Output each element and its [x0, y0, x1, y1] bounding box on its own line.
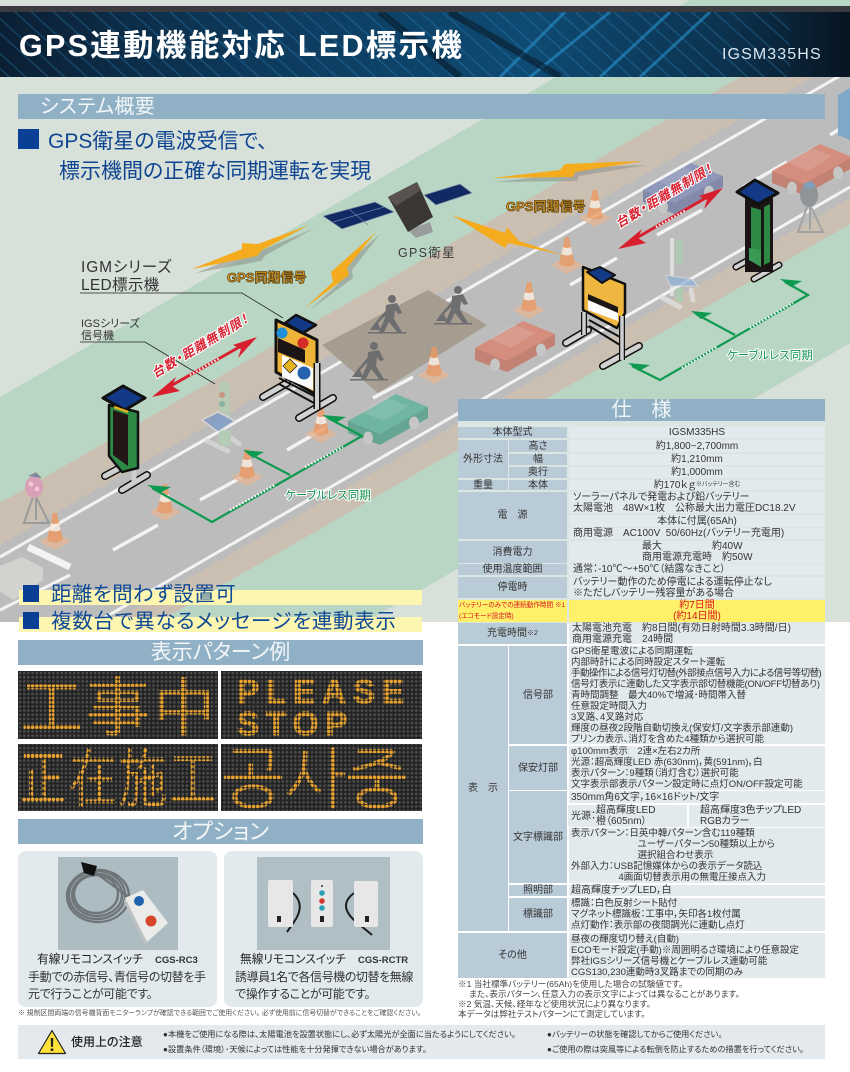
spec: signal unit: 手動操作による信号灯切替(外部接点信号入力による信号等切替) — [571, 668, 821, 679]
spec: safety light: 表示パターン：9種類（消灯含む）選択可能 — [571, 768, 739, 779]
spec: charge time — [458, 622, 825, 645]
spec: dimensions — [458, 440, 825, 478]
red double arrow right — [618, 188, 723, 249]
spec: model: IGSM335HS — [669, 427, 725, 438]
spec: text sign unit: 選択組合わせ表示 — [638, 850, 713, 861]
spec: power consumption: 最大 約40W — [642, 541, 743, 552]
spec: text sign unit: 超高輝度LED — [596, 805, 655, 816]
spec: signal unit: プリンカ表示、消灯を含めた4種類から選択可能 — [571, 734, 764, 745]
spec: outage: バッテリー動作のため停電による運転停止なし — [573, 577, 772, 588]
description: wired remote: 元で行うことが可能です。 — [28, 987, 152, 1001]
caution title: 使用上の注意 — [71, 1035, 143, 1049]
spec: sign board: 標識：白色反射シート貼付 — [571, 898, 677, 909]
spec: others: 昼夜の輝度切り替え(自動) — [571, 934, 679, 945]
spec: others: 弊社IGSシリーズ信号機とケーブルレス連動可能 — [571, 956, 767, 967]
caution items right: ●ご使用の際は突風等による転倒を防止するための措置を行ってください。 — [547, 1045, 804, 1054]
description: wired remote — [28, 970, 206, 1001]
spec: text sign unit: 光源： — [571, 810, 596, 822]
spec: text sign unit: 外部入力：USB記憶媒体からの表示データ読込 — [571, 861, 762, 872]
spec: charge time: 充電時間 — [487, 628, 527, 639]
spec footnotes — [458, 979, 740, 1019]
spec: sign board — [509, 898, 825, 931]
option heading — [18, 819, 423, 844]
LED panel: PLEASE STOP: STOP — [237, 705, 354, 742]
lightning bolts — [192, 161, 647, 310]
spec: charge time: ※2 — [527, 630, 538, 637]
caution items left: ●設置条件（環境）･天候によっては性能を十分発揮できない場合があります。 — [163, 1045, 427, 1054]
bus bottom left — [0, 557, 43, 600]
spec: temperature: 通常：-10℃～+50℃（結露なきこと） — [573, 564, 725, 575]
spec: signal unit: 3叉路､4叉路対応 — [571, 712, 643, 723]
label: GPS sync signal right: GPS同期信号 — [506, 199, 585, 214]
spec: signal unit: 輝度の昼夜2段階自動切換え(保安灯/文字表示部連動) — [571, 723, 793, 734]
title: GPS連動機能対応 LED標示機 — [19, 29, 464, 63]
spec: text sign unit: 橙（605nm） — [596, 816, 647, 827]
spec: others: CGS130,230連動時3叉路までの同期のみ — [571, 967, 743, 978]
spec: power: 太陽電池 48W×1枚 公称最大出力電圧DC18.2V — [573, 503, 796, 514]
caption: wired remote: 有線リモコンスイッチ — [37, 953, 143, 966]
label: IGM series — [80, 258, 283, 318]
warning light right — [798, 181, 823, 232]
spec panel backdrop — [458, 399, 825, 623]
spec: model: 本体型式 — [492, 427, 532, 438]
spec: charge time: 商用電源充電 24時間 — [572, 634, 673, 645]
spec: lighting: 照明部 — [523, 885, 553, 896]
headline — [18, 129, 371, 183]
spec: text sign unit — [509, 791, 825, 883]
work zone — [322, 290, 487, 393]
spec: lighting: 超高輝度チップLED，白 — [571, 885, 672, 896]
caution bar — [18, 1025, 825, 1059]
spec: power consumption: 商用電源充電時 約50W — [642, 552, 753, 563]
spec: power — [458, 491, 825, 539]
cars — [348, 144, 850, 445]
spec: lighting — [509, 884, 825, 896]
display pattern heading — [18, 640, 423, 665]
spec footnotes: 本データは弊社テストパターンにて測定しています。 — [458, 1009, 645, 1019]
spec: weight: 約170ｋｇ — [654, 480, 696, 490]
label: IGS series: IGSシリーズ — [81, 316, 140, 330]
description: wireless remote — [235, 970, 413, 1001]
label: GPS sync signal left: GPS同期信号 — [227, 270, 306, 285]
description: wired remote: 手動での赤信号、青信号の切替を手 — [28, 970, 206, 984]
photo: wireless remote — [257, 857, 390, 950]
spec: signal unit: GPS衛星電波による同期運転 — [571, 646, 693, 657]
spec footnotes: また、表示パターン、任意入力の表示文字によっては異なることがあります。 — [469, 989, 740, 999]
spec: dimensions: 高さ — [529, 440, 547, 452]
spec: outage: ※ただしバッテリー残容量がある場合 — [573, 588, 734, 599]
display pattern heading: 表示パターン例 — [151, 641, 290, 664]
label: cableless sync right: ケーブルレス同期 — [727, 348, 813, 362]
spec: text sign unit: 350mm角6文字，16×16ドット/文字 — [571, 792, 719, 802]
spec heading: 仕 様 — [612, 399, 672, 421]
spec: charge time: 太陽電池充電 約8日間(有効日射時間3.3時間/日) — [572, 623, 791, 634]
spec: text sign unit: 超高輝度3色チップLED — [700, 805, 801, 816]
spec: power consumption: 消費電力 — [492, 546, 532, 558]
spec: sign board: 点灯動作：表示部の夜間調光に連動し点灯 — [571, 920, 745, 931]
cones — [39, 190, 611, 550]
model: CGS-RCTR: CGS-RCTR — [358, 955, 408, 966]
label: IGS series: 信号機 — [81, 328, 114, 342]
spec: dimensions: 約1,210mm — [671, 454, 723, 465]
caution items right — [547, 1030, 804, 1054]
signal left IGS — [202, 382, 239, 451]
spec heading — [458, 399, 825, 421]
spec: text sign unit: 4画面切替表示用の無電圧接点入力 — [618, 872, 766, 883]
spec: weight: 重量 — [473, 480, 493, 490]
spec: signal unit: 青時間調整 最大40%で増減･時間帯入替 — [571, 690, 746, 701]
spec: power consumption — [458, 540, 825, 563]
LED sign main — [263, 315, 333, 418]
spec: safety light: 保安灯部 — [518, 762, 558, 774]
spec: dimensions: 約1,000mm — [671, 467, 723, 478]
spec: signal unit: 任意設定時間入力 — [571, 701, 647, 712]
spec: battery runtime highlighted: (エコモード設定時) — [459, 613, 514, 620]
spec: others — [458, 933, 825, 978]
feature strip 1: 距離を問わず設置可 — [51, 583, 236, 606]
spec: signal unit: 信号部 — [523, 690, 553, 700]
icon: warning triangle: ! — [49, 1035, 55, 1055]
headline: GPS衛星の電波受信で、 — [48, 130, 268, 153]
spec: battery runtime highlighted: (約14日間) — [673, 611, 721, 622]
caution items right: ●バッテリーの状態を確認してからご使用ください。 — [547, 1030, 722, 1039]
feature strip 1 — [19, 583, 422, 606]
spec: dimensions: 外形寸法 — [463, 454, 503, 464]
spec: display — [458, 646, 825, 931]
caption: wireless remote: 無線リモコンスイッチ — [240, 953, 346, 966]
LED panel: 공사중: 공사중 — [222, 746, 408, 812]
system overview heading — [18, 94, 825, 119]
feature strip 2: 複数台で異なるメッセージを連動表示 — [51, 610, 397, 633]
spec: weight — [458, 479, 825, 490]
spec: temperature — [458, 563, 825, 575]
spec: signal unit: 内部時計による同時設定スタート運転 — [571, 657, 725, 668]
LED sign left tower — [103, 386, 147, 490]
signal right IGS — [661, 238, 698, 307]
red text left: 台数・距離無制限！ — [149, 311, 252, 381]
spec: safety light: φ100mm表示 2連×左右2カ所 — [571, 746, 700, 757]
red double arrow left — [152, 337, 257, 397]
spec footnotes: ※1 当社標準バッテリー(65Ah)を使用した場合の試験値です。 — [458, 979, 683, 989]
spec: power: 商用電源 AC100V 50/60Hz(バッテリー充電用) — [573, 528, 784, 539]
green arrows right — [628, 279, 808, 380]
caution items left: ●本機をご使用になる際は、太陽電池を設置状態にし、必ず太陽光が全面に当たるようにしてください。 — [163, 1030, 516, 1039]
label: GPS satellite: GPS衛星 — [398, 246, 456, 260]
option card: wireless remote — [224, 851, 423, 1007]
spec: weight: 本体 — [528, 480, 548, 490]
label: IGS series — [80, 316, 215, 384]
photo: wired remote — [58, 857, 178, 950]
spec: sign board: 標識部 — [523, 909, 553, 920]
spec: outage — [458, 576, 825, 599]
label: cableless sync left: ケーブルレス同期 — [285, 488, 371, 502]
spec: others: その他 — [498, 950, 527, 961]
spec: battery runtime highlighted: バッテリーのみでの連続動作時間 ※1 — [459, 602, 565, 609]
spec: dimensions: 奥行 — [528, 467, 548, 478]
spec: text sign unit: ユーザーパターン50種類以上から — [638, 839, 775, 850]
spec: text sign unit: RGBカラー — [700, 816, 749, 827]
option card: wired remote — [18, 851, 217, 1007]
spec: text sign unit: 文字標識部 — [513, 832, 563, 842]
spec: sign board: マグネット標識板：工事中，矢印各1枚付属 — [571, 909, 741, 920]
model: CGS-RC3: CGS-RC3 — [155, 955, 198, 966]
spec: power: 本体に付属(65Ah) — [657, 516, 737, 526]
option heading: オプション — [172, 819, 269, 844]
LED display examples — [18, 671, 422, 812]
headline: 標示機間の正確な同期運転を実現 — [59, 160, 371, 183]
spec: text sign unit: 表示パターン：日英中韓パターン含む119種類 — [571, 828, 755, 839]
spec: safety light: 光源：超高輝度LED 赤(630nm)，黄(591nm)，白 — [571, 757, 763, 768]
LED panel: PLEASE STOP — [221, 671, 422, 742]
spec: signal unit: 信号灯表示に連動した文字表示部切替機能(ON/OFF切替あり) — [571, 679, 820, 690]
description: wireless remote: で操作することが可能です。 — [235, 987, 370, 1001]
spec: outage: 停電時 — [498, 582, 528, 593]
red text right: 台数・距離無制限！ — [613, 161, 716, 231]
caution items left — [163, 1030, 516, 1054]
workers — [350, 286, 472, 380]
spec: dimensions: 約1,800~2,700mm — [656, 440, 738, 452]
spec: battery runtime highlighted: 約7日間 — [679, 600, 715, 611]
warning light left — [24, 473, 49, 523]
header banner — [0, 12, 850, 77]
LED panel: 正在施工: 正在施工 — [18, 745, 218, 810]
spec footnotes: ※2 気温、天候、経年など使用状況により異なります。 — [458, 999, 651, 1009]
top stripe — [0, 6, 850, 12]
LED sign right tower — [736, 180, 779, 279]
spec: safety light: 文字表示部表示パターン設定時に点灯ON/OFF設定可能 — [571, 779, 803, 790]
spec: others: ECOモード設定(手動)※周囲明るさ環境により任意設定 — [571, 945, 799, 956]
system overview heading: システム概要 — [40, 96, 155, 118]
icon: warning triangle — [38, 1030, 66, 1055]
LED panel: PLEASE STOP: PLEASE — [237, 673, 411, 710]
spec: temperature: 使用温度範囲 — [482, 564, 542, 575]
spec: weight: ※バッテリー含む — [696, 482, 740, 488]
spec: display: 表 示 — [468, 783, 498, 794]
blue truck top right — [838, 88, 850, 140]
spec: dimensions: 幅 — [533, 454, 543, 465]
spec: battery runtime highlighted — [458, 599, 825, 622]
label: IGM series: IGMシリーズ — [81, 258, 172, 276]
model number: IGSM335HS — [722, 46, 822, 63]
spec: power: ソーラーパネルで発電および鉛バッテリー — [573, 492, 750, 503]
green arrows left — [147, 415, 362, 522]
spec: model — [458, 426, 825, 438]
spec: safety light — [509, 746, 825, 790]
option note: ※ 規制区間両端の信号機背面モニターランプが確認できる範囲でご使用ください。 必ず使用前に信号切替ができることをご確認ください。 — [18, 1010, 421, 1017]
spec: power: 電 源 — [498, 510, 528, 521]
spec: signal unit — [509, 646, 825, 745]
LED panel: 工事中: 工事中 — [19, 673, 217, 739]
label: IGM series: LED標示機 — [81, 276, 160, 294]
LED sign right yellow — [566, 267, 639, 366]
description: wireless remote: 誘導員1名で各信号機の切替を無線 — [235, 970, 413, 984]
satellite — [323, 182, 472, 238]
